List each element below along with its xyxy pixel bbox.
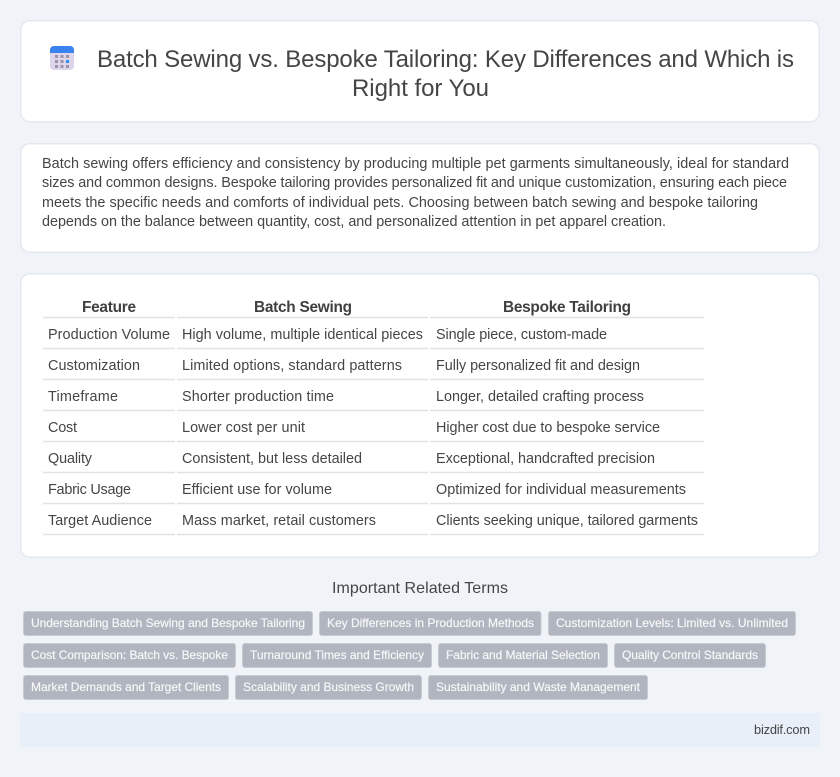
table header: Batch Sewing	[254, 299, 352, 316]
row: production volume: Production Volume	[48, 327, 170, 343]
row: target audience	[48, 513, 698, 529]
row: target audience: Mass market, retail customers	[182, 513, 376, 529]
tag: Key Differences in Production Methods	[327, 616, 534, 630]
row: fabric usage: Efficient use for volume	[182, 482, 332, 498]
title	[97, 46, 794, 102]
footer: bizdif.com	[754, 722, 810, 737]
row: fabric usage	[48, 482, 686, 498]
tag	[438, 644, 608, 668]
row: fabric usage: Fabric Usage	[48, 482, 131, 498]
footer	[20, 713, 820, 747]
tag: Quality Control Standards	[622, 648, 758, 662]
row: target audience: Clients seeking unique, tailored garments	[436, 513, 698, 529]
tag	[320, 612, 541, 636]
text block: introduction: depends on the balance between quantity, cost, and personalized attention in pet apparel creation.	[42, 214, 666, 230]
heading: important related terms: Important Related Terms	[332, 580, 508, 597]
text block: introduction	[42, 156, 789, 230]
row: quality: Exceptional, handcrafted precision	[436, 451, 655, 467]
row: quality: Quality	[48, 451, 93, 467]
row: timeframe: Timeframe	[48, 389, 118, 405]
tag	[236, 676, 422, 700]
panel: introduction	[21, 144, 819, 252]
row: customization: Customization	[48, 358, 140, 374]
row: customization: Fully personalized fit and design	[436, 358, 640, 374]
row: cost: Higher cost due to bespoke service	[436, 420, 660, 436]
table header: Feature	[82, 299, 136, 316]
table header: Bespoke Tailoring	[503, 299, 631, 316]
row: cost: Lower cost per unit	[182, 420, 305, 436]
related term tags	[24, 612, 796, 700]
row: quality: Consistent, but less detailed	[182, 451, 362, 467]
row: timeframe: Longer, detailed crafting process	[436, 389, 644, 405]
tag: Customization Levels: Limited vs. Unlimited	[556, 616, 788, 630]
row: timeframe: Shorter production time	[182, 389, 334, 405]
row: timeframe	[48, 389, 644, 405]
tag: Scalability and Business Growth	[243, 680, 414, 694]
title: Batch Sewing vs. Bespoke Tailoring: Key Differences and Which is	[97, 46, 794, 73]
row: target audience: Target Audience	[48, 513, 152, 529]
row: customization	[48, 358, 640, 374]
tag	[548, 612, 796, 636]
icon: calendar	[50, 46, 74, 70]
text block: introduction: meets the specific needs and comforts of individual pets. Choosing between batch sewing and bespoke tailoring	[42, 195, 758, 211]
tag	[242, 644, 432, 668]
row: production volume: Single piece, custom-made	[436, 327, 607, 343]
row: production volume: High volume, multiple identical pieces	[182, 327, 423, 343]
tag: Market Demands and Target Clients	[31, 680, 221, 694]
tag	[614, 644, 766, 668]
panel: header	[21, 21, 819, 122]
tag: Fabric and Material Selection	[446, 648, 600, 662]
tag	[24, 644, 236, 668]
row: cost	[48, 420, 660, 436]
title: Right for You	[352, 75, 489, 102]
tag: Sustainability and Waste Management	[436, 680, 641, 694]
tag	[24, 676, 228, 700]
row: quality	[48, 451, 655, 467]
tag: Turnaround Times and Efficiency	[250, 648, 424, 662]
row: cost: Cost	[48, 420, 77, 436]
tag	[24, 612, 312, 636]
row: production volume	[48, 327, 607, 343]
tag: Cost Comparison: Batch vs. Bespoke	[31, 648, 228, 662]
table header	[82, 299, 631, 316]
text block: introduction: sizes and common designs. Bespoke tailoring provides personalized fit and unique customization, ensuring each piece	[42, 175, 787, 191]
row: customization: Limited options, standard patterns	[182, 358, 402, 374]
text block: introduction: Batch sewing offers efficiency and consistency by producing multiple pet garments simultaneously, ideal for standard	[42, 156, 789, 172]
row: fabric usage: Optimized for individual measurements	[436, 482, 686, 498]
panel: comparison table	[21, 274, 819, 557]
tag	[428, 676, 648, 700]
tag: Understanding Batch Sewing and Bespoke Tailoring	[31, 616, 305, 630]
